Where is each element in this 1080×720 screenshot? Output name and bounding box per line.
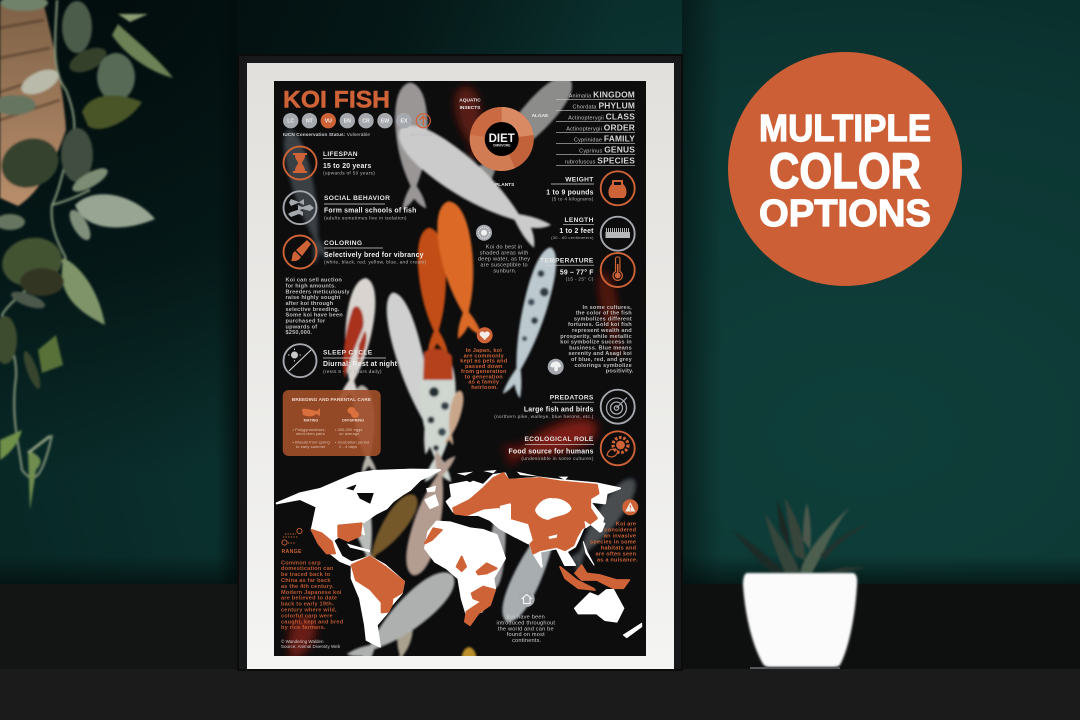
offspring notes: • Incubation period — [335, 440, 369, 444]
text: koi auction prices: $250,000. — [286, 330, 312, 336]
text: invasive warning — [590, 499, 638, 563]
text: koi auction prices: Koi can sell auction — [286, 278, 342, 284]
mating notes: • Polygynandrous; — [292, 427, 326, 432]
caribbean — [347, 543, 370, 552]
temperature: TEMPERATURE — [540, 258, 594, 264]
text: cultural color meaning: In some cultures, — [583, 305, 632, 311]
social behavior: Form small schools of fish — [324, 208, 416, 214]
mating notes: short-term pairs — [296, 431, 325, 436]
icon: palette — [548, 359, 564, 375]
text: cultural color meaning — [548, 305, 634, 375]
conservation status row: CR — [362, 119, 370, 125]
source credit: © Wandering Walden — [281, 638, 324, 644]
icon: fish school — [284, 191, 316, 224]
taxonomy table: Cyprinus GENUS — [579, 144, 635, 154]
icon: house — [519, 591, 535, 607]
text: cultural color meaning: fortunes. Gold koi fish — [568, 322, 632, 328]
offspring notes: • 300,000 eggs — [335, 427, 362, 432]
text: sun and shade: are susceptible to — [480, 262, 528, 268]
coloring: (white, black, red, yellow, blue, and cream) — [324, 259, 427, 265]
panel: breeding and parental care: MATING — [304, 418, 318, 422]
panel: breeding and parental care — [283, 390, 381, 456]
text: koi auction prices: purchased for — [286, 318, 326, 324]
offspring notes: on average — [339, 431, 359, 436]
icon: heart — [477, 327, 493, 343]
text: japan heirloom: from generation — [461, 369, 507, 375]
taxonomy table: Cyprinidae FAMILY — [574, 134, 635, 144]
icon: range route — [282, 528, 302, 545]
range text: be traced back to — [281, 572, 331, 578]
range text: by rice farmers. — [281, 625, 326, 631]
length: 1 to 2 feet — [559, 228, 594, 235]
text: invasive warning: an invasive — [604, 534, 636, 540]
text: sun and shade — [476, 225, 532, 274]
range text: Modern Japanese koi — [281, 590, 342, 596]
white koi — [384, 290, 432, 456]
text: global introduction: Koi have been — [507, 614, 545, 620]
text: japan heirloom: as a family — [468, 380, 500, 386]
ecological role: ECOLOGICAL ROLE — [524, 436, 594, 443]
spotted kohaku — [420, 349, 456, 482]
large white diagonal fish — [398, 124, 552, 249]
text: cultural color meaning: the color of the fish — [576, 311, 632, 317]
range text — [281, 528, 345, 649]
text: cultural color meaning: prosperity, while metallic — [560, 334, 632, 340]
text: japan heirloom — [460, 327, 509, 391]
weight: (5 to 4 kilograms) — [552, 196, 594, 202]
text: sun and shade: Koi do best in — [486, 245, 522, 251]
south america — [352, 557, 404, 647]
sleep cycle — [284, 344, 398, 377]
range text: colorful carp were — [281, 613, 333, 619]
predators: (northern pike, walleye, blue herons, etc.) — [494, 414, 594, 420]
range text: China as far back — [281, 578, 331, 584]
dark blurred fish — [278, 83, 643, 673]
text: cultural color meaning: of blue, red, and grey — [571, 357, 633, 363]
conservation status row — [283, 113, 433, 137]
sleep cycle: (rests 8 - 10 hours daily) — [323, 369, 382, 375]
text: invasive warning: habitats and — [601, 546, 637, 552]
diet labels: INSECTS — [460, 105, 481, 111]
coloring — [284, 236, 427, 268]
range text: back to early 19th- — [281, 602, 334, 608]
icon: thermometer — [601, 253, 635, 287]
lifespan — [284, 146, 375, 180]
length — [551, 217, 635, 251]
chart: diet donut: OMNIVORE — [493, 144, 510, 148]
diet labels: AQUATIC — [459, 98, 481, 104]
text: japan heirloom: heirloom. — [471, 385, 498, 391]
poster panel — [274, 68, 646, 702]
conservation status row: EX — [401, 119, 408, 125]
text: cultural color meaning: represent wealth and — [572, 328, 632, 334]
text: japan heirloom: In Japan, koi — [466, 348, 502, 354]
badge: multiple color options: COLOR — [769, 143, 921, 199]
conservation status row: EN — [344, 119, 351, 125]
coloring: Selectively bred for vibrancy — [324, 252, 424, 259]
range text: as the 4th century. — [281, 584, 334, 590]
fish under the map — [404, 450, 457, 577]
text: cultural color meaning: serenity and Asagi koi — [568, 351, 632, 357]
lifespan: (upwards of 50 years) — [323, 170, 375, 176]
text: cultural color meaning: business. Blue means — [569, 345, 632, 351]
top right grey fish — [478, 81, 574, 180]
text: sun and shade: sunburn. — [493, 268, 517, 274]
text: koi auction prices: upwards of — [286, 324, 317, 330]
temperature: (15 - 25° C) — [566, 276, 594, 282]
icon: paint brush — [284, 236, 316, 268]
orange fish rear — [415, 227, 452, 355]
length: LENGTH — [564, 217, 594, 224]
text: koi auction prices: for high amounts. — [286, 283, 336, 289]
chart: diet donut: DIET — [489, 133, 515, 145]
text: koi auction prices: selective breeding. — [286, 307, 340, 313]
icon: sun and moon — [284, 344, 316, 377]
range text: RANGE — [282, 549, 302, 555]
range text: domestication can — [281, 566, 334, 572]
badge: multiple color options: MULTIPLE — [759, 108, 931, 150]
panel: breeding and parental care: OFFSPRING — [342, 418, 364, 422]
range text: Common carp — [281, 560, 321, 566]
text: japan heirloom: passed down — [465, 364, 503, 370]
text: koi auction prices: after koi through — [286, 301, 334, 307]
text: global introduction: found on most — [507, 632, 545, 638]
koi photo background — [282, 81, 639, 656]
white pot — [743, 573, 857, 667]
temperature — [540, 253, 635, 287]
social behavior: SOCIAL BEHAVIOR — [324, 195, 390, 202]
icon: warning — [622, 499, 638, 515]
icon: hourglass — [284, 146, 316, 180]
title: KOI FISH — [283, 86, 390, 114]
predators: PREDATORS — [550, 394, 594, 402]
predators — [494, 390, 635, 424]
taxonomy table: Animalia KINGDOM — [569, 90, 635, 100]
text: global introduction: introduced throughout — [497, 620, 555, 626]
text: sun and shade: deep water, as they — [478, 256, 530, 262]
taxonomy table: Chordata PHYLUM — [572, 100, 635, 110]
conservation status row: IUCN Conservation Status: Vulnerable — [283, 132, 370, 137]
panel: breeding and parental care: BREEDING AND PARENTAL CARE — [292, 397, 371, 402]
text: koi auction prices: Breeders meticulously — [286, 289, 350, 295]
range text: century where wild, — [281, 608, 337, 614]
text: sun and shade: shaded areas with — [480, 251, 529, 257]
range text: caught, kept and bred — [281, 619, 344, 625]
text: invasive warning: are often seen — [596, 552, 637, 558]
mating notes: • Breeds from spring — [292, 440, 330, 444]
mating notes: to early summer — [296, 444, 326, 449]
offspring notes: 2 - 4 days — [339, 444, 357, 449]
badge: multiple color options — [728, 52, 962, 286]
weight — [546, 171, 635, 205]
world range map — [277, 470, 642, 647]
text: invasive warning: considered — [604, 528, 637, 534]
length: (30 - 60 centimeters) — [551, 235, 594, 240]
lifespan: 15 to 20 years — [323, 163, 371, 170]
text: koi auction prices: raise highly sought — [286, 295, 341, 301]
conservation status row: EW — [381, 119, 389, 125]
hanging plant with basket — [0, 0, 173, 510]
taxonomy table — [556, 90, 635, 166]
taxonomy table: Actinopterygii ORDER — [566, 122, 635, 132]
taxonomy table: rubrofuscus SPECIES — [565, 156, 635, 166]
text: global introduction: the world and can be — [498, 626, 554, 632]
text: koi auction prices: Some koi have been — [286, 313, 343, 319]
chart: diet donut: PLANTS — [495, 182, 515, 188]
icon: eggs — [348, 407, 359, 418]
text: cultural color meaning: colorings symbolize — [574, 363, 632, 369]
conservation status row: LC — [287, 119, 294, 125]
weight: 1 to 9 pounds — [546, 190, 594, 196]
text: japan heirloom: kept as pets and — [460, 359, 508, 365]
icon: gear and leaf — [601, 431, 635, 465]
taxonomy table: Actinopterygii CLASS — [568, 112, 635, 122]
conservation status row: NT — [306, 119, 314, 125]
text: global introduction: continents. — [512, 638, 542, 644]
ecological role: (undesirable in some cultures) — [521, 456, 594, 462]
icon: sun — [476, 225, 492, 241]
icon: ruler — [601, 217, 635, 251]
picture frame — [237, 54, 683, 671]
temperature: 59 – 77° F — [560, 268, 594, 276]
text: global introduction — [497, 591, 557, 644]
spotted blue-white fish — [500, 244, 563, 399]
text: invasive warning: species in some — [590, 540, 636, 546]
weight: WEIGHT — [565, 176, 594, 184]
social behavior — [284, 191, 416, 224]
eurasia, africa, oceania — [425, 470, 642, 638]
text: invasive warning: as a nuisance. — [597, 557, 638, 563]
text: cultural color meaning: symbolizes different — [574, 316, 632, 322]
north america — [277, 470, 440, 647]
succulent in white pot — [732, 498, 870, 669]
conservation status row: VU — [325, 119, 332, 125]
text: invasive warning: Koi are — [616, 522, 636, 528]
sleep cycle: SLEEP CYCLE — [323, 350, 373, 357]
text: cultural color meaning: positivity. — [606, 369, 634, 375]
icon: target — [601, 390, 635, 424]
shelf — [0, 584, 1080, 720]
text: cultural color meaning: koi symbolize success in — [560, 340, 632, 346]
text: japan heirloom: to generation — [465, 374, 503, 380]
red and white fish — [340, 276, 378, 400]
coloring: COLORING — [324, 240, 362, 247]
ecological role: Food source for humans — [509, 448, 594, 456]
text: japan heirloom: are commonly — [464, 354, 505, 360]
badge: multiple color options: OPTIONS — [759, 193, 931, 235]
icon: kettlebell — [601, 171, 635, 205]
social behavior: (adults sometimes live in isolation) — [324, 215, 407, 221]
chart: diet donut: ALGAE — [532, 113, 549, 119]
top fish — [394, 82, 431, 210]
sleep cycle: Diurnal; Rest at night — [323, 361, 398, 368]
lifespan: LIFESPAN — [323, 151, 358, 158]
orange fish front — [435, 200, 481, 340]
range text: are believed to date — [281, 596, 337, 602]
source credit: Source: Animal Diversity Web — [281, 644, 341, 649]
ecological role — [509, 431, 635, 465]
conservation status row: Increasing — [410, 132, 433, 137]
succulent leaves — [732, 498, 870, 573]
icon: mating fish — [302, 408, 320, 416]
predators: Large fish and birds — [524, 406, 594, 414]
chart: diet donut — [459, 98, 549, 188]
